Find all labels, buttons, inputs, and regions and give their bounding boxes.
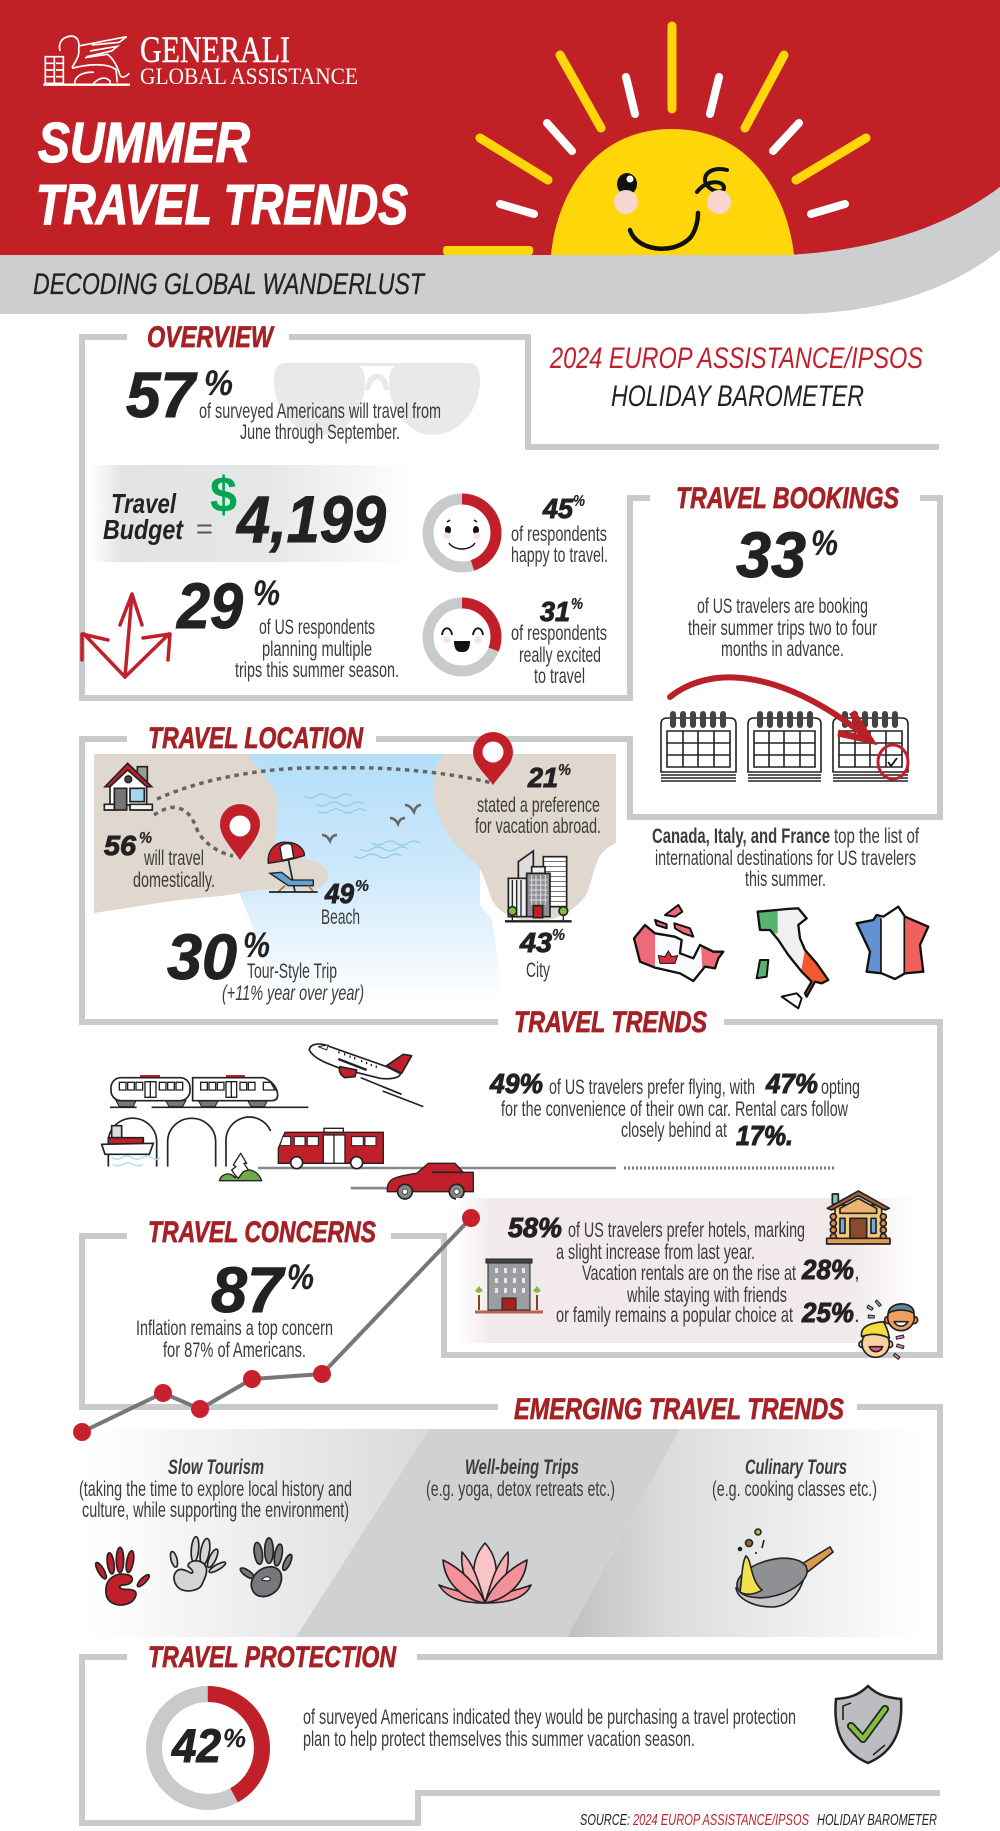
text: culinary tours [712,1456,877,1501]
donut: 42 percent protection: % [223,1723,246,1753]
stat: 43 percent city [519,927,565,982]
stat: 33 percent booking [688,519,877,661]
text: well-being trips: Well-being Trips [465,1456,579,1479]
flying and car text: for the convenience of their own car. Rental cars follow [501,1098,849,1121]
stat: 56 percent domestic: will travel [143,847,204,870]
panel: accommodation: 28% [801,1254,854,1285]
stat: 33 percent booking: of US travelers are booking [697,595,868,618]
flying and car text: opting [821,1076,860,1099]
stat: 30 percent tour-style: % [243,926,270,965]
stat: 57 percent travel: of surveyed Americans will travel from [199,400,441,423]
title [36,111,408,237]
icon: friends faces [859,1300,918,1359]
donut: 42 percent protection [154,1694,262,1802]
title: SUMMER [38,111,250,175]
stat: 43 percent city: % [552,927,565,944]
stat: 30 percent tour-style: (+11% year over year) [222,982,364,1005]
stat: 49 percent beach: % [355,878,369,895]
subtitle: DECODING GLOBAL WANDERLUST [33,268,426,301]
travel budget: Budget [103,514,184,545]
icon: light gray hand [169,1536,227,1591]
stat: 57 percent travel: % [204,364,233,403]
international destinations text: top the list of [834,825,919,848]
panel: accommodation: a slight increase from last year. [556,1241,755,1264]
stat: 87 percent inflation: for 87% of Americans. [163,1339,306,1362]
donut: 45 percent happy [428,499,496,567]
stat: 29 percent multiple trips: planning multiple [262,638,372,661]
text: well-being trips: (e.g. yoga, detox retreats etc.) [426,1478,615,1501]
heading: travel concerns: TRAVEL CONCERNS [148,1216,376,1249]
stat: 31 percent [511,596,607,688]
panel: emerging trends background [87,1429,923,1637]
flying and car text: of US travelers prefer flying, with [549,1076,755,1099]
stat: 29 percent multiple trips: % [253,574,280,613]
flying and car text: 49% [489,1068,543,1099]
icon: smiling sun [443,26,866,255]
icon: cabin [827,1191,890,1244]
stat: 57 percent travel: 57 [126,359,198,431]
stat: 21 percent abroad: 21 [527,762,558,793]
icon: dark gray hand [239,1538,294,1597]
stat: 57 percent travel: June through September. [240,421,400,444]
stat: 49 percent beach: Beach [321,906,360,929]
travel budget: 4,199 [235,482,386,556]
frame lines [82,337,940,1823]
stat: 56 percent domestic: domestically. [133,869,215,892]
stat: 45 percent [511,493,608,567]
icon: winged lion [43,36,130,85]
donut: 31 percent excited [428,603,496,671]
panel: accommodation: of US travelers prefer hotels, marking [568,1219,805,1242]
road lines [258,1168,836,1188]
water [240,754,502,1000]
stat: 31 percent: % [571,596,583,613]
text: well-being trips [426,1456,615,1501]
stat: 30 percent tour-style [167,921,364,1005]
text: protection description [303,1706,796,1751]
heading: travel trends: TRAVEL TRENDS [514,1006,707,1039]
icon: red hand [94,1547,151,1605]
text: slow tourism [79,1456,352,1522]
waves and birds [304,794,421,858]
flying and car text: 47% [765,1068,818,1099]
panel: accommodation: . [854,1304,860,1327]
stat: 31 percent: of respondents [511,622,607,645]
stat: 49 percent beach: 49 [324,878,354,909]
source: 2024 EUROP ASSISTANCE/IPSOS [632,1812,809,1829]
stat: 31 percent: 31 [540,596,570,627]
stat: 33 percent booking: 33 [736,519,806,591]
title: TRAVEL TRENDS [36,173,408,237]
stat: 21 percent abroad: % [558,762,571,779]
stat: 33 percent booking: their summer trips two to four [688,617,877,640]
icon: car [351,1163,473,1199]
stat: 30 percent tour-style: Tour-Style Trip [247,960,337,983]
source: HOLIDAY BAROMETER [817,1812,937,1829]
stat: 21 percent abroad: for vacation abroad. [475,815,601,838]
heading: travel bookings: TRAVEL BOOKINGS [676,482,899,515]
stat: 87 percent inflation: % [287,1258,314,1297]
panel: accommodation [456,1198,917,1343]
text: protection description: plan to help protect themselves this summer vacation season. [303,1728,695,1751]
stat: 31 percent: really excited [519,644,601,667]
panel: accommodation: , [854,1261,860,1284]
icon: house [104,763,152,810]
international destinations text: this summer. [745,868,826,891]
panel: accommodation: or family remains a popular choice at [556,1304,793,1327]
source: SOURCE: [580,1812,630,1829]
map: Italy flag [755,905,832,1008]
logo: Generali Global Assistance: GENERALI [140,30,290,71]
icon: bus [278,1128,383,1169]
barometer title [549,342,923,413]
stat: 33 percent booking: months in advance. [721,638,844,661]
stat: 29 percent multiple trips: 29 [176,570,243,642]
icon: shield with check [835,1686,901,1763]
icon: city buildings [505,851,572,921]
text: slow tourism: Slow Tourism [168,1456,264,1479]
stat: 45 percent: 45 [542,493,573,524]
land right [433,754,616,922]
logo: Generali Global Assistance [43,30,358,89]
stat: 87 percent inflation: 87 [211,1254,286,1326]
travel budget: = [196,513,213,544]
panel: accommodation: 58% [508,1212,562,1243]
icon: ship and arches [102,1117,271,1167]
stat: 29 percent multiple trips [176,570,399,682]
map: Canada flag [632,905,725,985]
icon: calendars [661,714,908,781]
header banner [0,0,1000,314]
icon: multi-direction arrows [82,594,170,677]
stat: 56 percent domestic: 56 [104,830,136,861]
barometer title: HOLIDAY BAROMETER [611,380,864,413]
icon: train [110,1075,308,1107]
stat: 30 percent tour-style: 30 [167,921,237,993]
stat: 45 percent: of respondents [511,523,607,546]
dotted routes [154,768,492,856]
stat: 56 percent domestic: % [139,830,152,847]
panel: accommodation: 25% [801,1297,854,1328]
text: culinary tours: (e.g. cooking classes etc.) [712,1478,877,1501]
flying and car text [489,1068,860,1151]
stat: 43 percent city: City [526,959,550,982]
icon: map pin domestic [220,804,260,860]
panel: accommodation: Vacation rentals are on the rise at [582,1262,796,1285]
stat: 31 percent: to travel [534,665,585,688]
map: travel location [94,754,616,1000]
stat: 33 percent booking: % [811,524,838,563]
heading: travel protection: TRAVEL PROTECTION [148,1641,397,1674]
travel budget [90,465,414,562]
icon: wok [733,1529,833,1607]
flying and car text: closely behind at [621,1119,727,1142]
icon: lotus [439,1543,531,1603]
travel budget: $ [210,467,237,523]
stat: 87 percent inflation [136,1254,333,1362]
icon: sunglasses [274,363,480,435]
stat: 49 percent beach [321,878,369,929]
stat: 56 percent domestic [104,830,215,892]
land left [94,754,328,913]
heading: travel location: TRAVEL LOCATION [148,722,364,755]
map: France flag [855,905,931,980]
international destinations text: Canada, Italy, and France [652,825,830,848]
line chart [73,1209,480,1441]
icon: hotel [475,1259,543,1312]
panel: accommodation: while staying with friends [626,1284,787,1307]
icon: tree and hills [219,1153,262,1181]
stat: 29 percent multiple trips: trips this summer season. [235,659,399,682]
stat: 43 percent city: 43 [519,927,552,958]
stat: 21 percent abroad [475,762,601,838]
stat: 87 percent inflation: Inflation remains a top concern [136,1317,333,1340]
stat: 29 percent multiple trips: of US respondents [259,616,375,639]
text: culinary tours: Culinary Tours [745,1456,847,1479]
logo: Generali Global Assistance: GLOBAL ASSISTANCE [140,64,358,89]
heading: emerging travel trends: EMERGING TRAVEL TRENDS [514,1393,844,1426]
icon: airplane [309,1044,423,1107]
flying and car text: 17%. [736,1120,793,1151]
stat: 45 percent: % [573,493,585,510]
icon: map pin abroad [473,732,513,785]
stat: 45 percent: happy to travel. [511,544,608,567]
icon: beach umbrella and chair [268,842,318,892]
donut: 42 percent protection: 42 [171,1719,221,1772]
arrow: curved red booking arrow [670,677,908,779]
international destinations text [652,825,919,891]
text: slow tourism: (taking the time to explore local history and [79,1478,352,1501]
heading: overview: OVERVIEW [147,321,275,354]
travel budget: Travel [111,488,177,519]
stat: 21 percent abroad: stated a preference [477,794,600,817]
stat: 57 percent travel [126,359,441,444]
text: slow tourism: culture, while supporting the environment) [82,1499,349,1522]
